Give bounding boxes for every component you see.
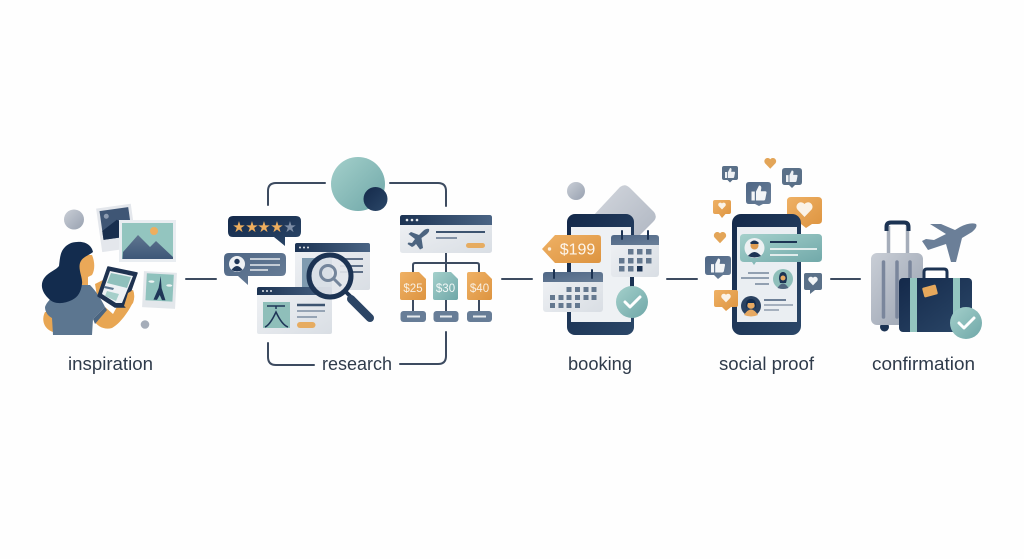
bracket: bottom left (268, 343, 314, 365)
label: social proof: social proof (719, 354, 815, 374)
icon: top heart (764, 158, 776, 169)
icon: thumbs up bubble left (705, 256, 731, 279)
price doc: $40 (467, 272, 492, 300)
star rating bubble (228, 216, 301, 246)
arrow: connector 4 (831, 278, 860, 280)
star rating bubble: ★ (232, 219, 246, 236)
option pills (400, 311, 492, 322)
photo: night mountain polaroid (96, 204, 137, 252)
price tree connectors (413, 253, 479, 311)
bracket: top right (390, 183, 446, 206)
icon: small thumbs up bubble (722, 166, 738, 182)
panel: booking (542, 182, 659, 335)
icon: rolling suitcase (871, 222, 923, 332)
phone (567, 214, 634, 335)
woman with tablet (42, 242, 137, 335)
star rating bubble: ★ (257, 219, 271, 236)
star rating bubble: ★ (283, 219, 297, 236)
star rating bubble: ★ (270, 219, 284, 236)
price doc: $25 (400, 272, 426, 300)
arrow: connector 2 (502, 278, 532, 280)
decorative gray diamond (592, 185, 656, 250)
label: booking: booking (568, 354, 632, 374)
panel: social proof (705, 158, 822, 335)
label: confirmation: confirmation (872, 354, 975, 374)
teal profile card (740, 234, 822, 265)
icon: gray circle (567, 182, 585, 200)
icon: gray circle (64, 210, 84, 230)
bracket: bottom right (400, 332, 446, 364)
price doc: $40: $40 (470, 283, 489, 295)
panel: research (224, 157, 492, 365)
calendar: right (611, 231, 659, 277)
panel: inspiration (42, 204, 177, 335)
calendar: left (543, 270, 603, 312)
icon: teal circle (331, 157, 385, 211)
comment: woman avatar (741, 269, 793, 289)
comment: third avatar (741, 296, 793, 316)
star rating bubble: ★ (245, 219, 259, 236)
price doc: $30: $30 (436, 283, 455, 295)
price tag: $199 (560, 242, 595, 258)
icon: large heart bubble (787, 197, 822, 228)
icon: check badge (616, 286, 648, 318)
icon: heart bubble lower left (714, 290, 738, 311)
browser window: flight (400, 215, 492, 253)
label: inspiration: inspiration (68, 354, 153, 374)
phone (732, 214, 801, 335)
icon: thumbs up bubble right (782, 168, 802, 188)
icon: large thumbs up bubble (746, 182, 771, 206)
icon: small dot (141, 320, 149, 329)
person comment bubble (224, 253, 286, 285)
photo: Eiffel tower (142, 271, 177, 309)
arrow: connector 3 (667, 278, 697, 280)
icon: briefcase (899, 269, 972, 332)
icon: small heart bubble (713, 200, 731, 218)
icon: dark heart bubble (804, 273, 822, 294)
price doc: $30 (433, 272, 458, 300)
browser window: back (295, 243, 370, 296)
icon: magnifying glass (309, 255, 370, 318)
phone detail between calendars (630, 277, 634, 291)
icon: airplane (922, 223, 976, 262)
price doc: $25: $25 (403, 283, 423, 295)
icon: check badge (950, 307, 982, 339)
label: research: research (322, 354, 392, 374)
bracket: top left (268, 183, 325, 205)
panel: confirmation (871, 222, 982, 339)
browser window: front (257, 287, 332, 334)
price tag (542, 235, 601, 263)
icon: heart (714, 232, 726, 243)
icon: navy circle (364, 187, 388, 211)
photo: mountain landscape (119, 220, 176, 262)
arrow: connector 1 (186, 278, 216, 280)
